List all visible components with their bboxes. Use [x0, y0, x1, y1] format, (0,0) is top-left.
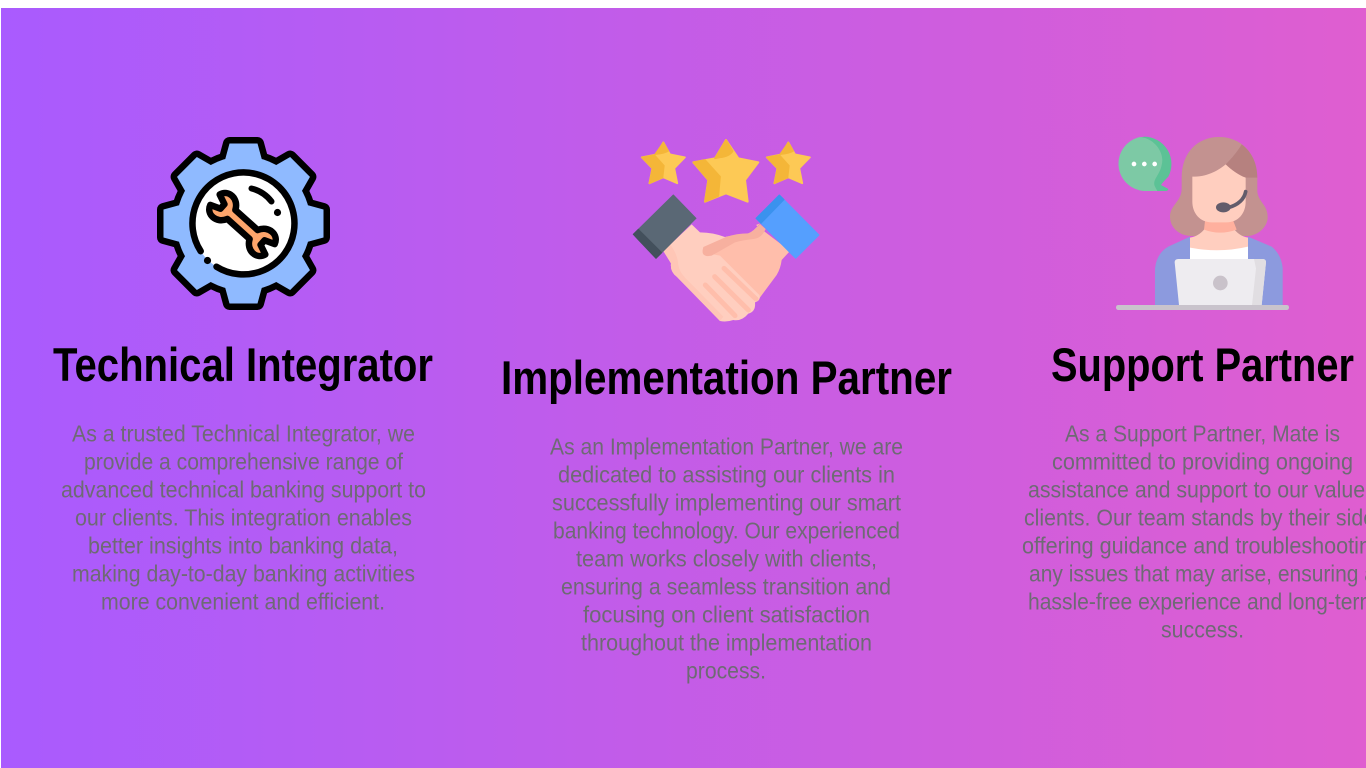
description: Support Partner	[1022, 420, 1366, 642]
description: Implementation Partner: team works closely with clients,	[576, 546, 877, 572]
description: Implementation Partner: As an Implementation Partner, we are	[550, 434, 903, 460]
description: Technical Integrator: better insights into banking data,	[88, 532, 398, 558]
description: Technical Integrator: making day-to-day banking activities	[72, 560, 415, 586]
icon: gear with wrench	[164, 144, 324, 304]
description: Implementation Partner	[550, 434, 903, 684]
description: Implementation Partner: banking technology. Our experienced	[553, 518, 900, 544]
description: Technical Integrator	[61, 420, 426, 614]
description: Implementation Partner: focusing on client satisfaction	[583, 602, 870, 628]
description: Support Partner: As a Support Partner, Mate is	[1065, 420, 1340, 446]
description: Implementation Partner: ensuring a seamless transition and	[561, 574, 891, 600]
description: Implementation Partner: successfully implementing our smart	[552, 490, 902, 516]
icon: support agent with headset and speech bubble	[1116, 137, 1289, 310]
description: Technical Integrator: advanced technical banking support to	[61, 476, 426, 502]
description: Implementation Partner: dedicated to assisting our clients in	[558, 462, 895, 488]
description: Implementation Partner: process.	[686, 658, 766, 684]
description: Support Partner: committed to providing ongoing	[1052, 448, 1353, 474]
panel: Technical Integrator	[53, 144, 433, 614]
description: Technical Integrator: our clients. This integration enables	[75, 504, 412, 530]
icon: handshake with three stars	[633, 140, 819, 321]
panel: Implementation Partner	[501, 140, 952, 683]
panel: Support Partner	[1022, 137, 1366, 642]
description: Technical Integrator: more convenient and efficient.	[101, 588, 385, 614]
heading: Technical Integrator: Technical Integrator	[53, 338, 433, 391]
description: Technical Integrator: provide a comprehensive range of	[84, 448, 404, 474]
description: Technical Integrator: As a trusted Technical Integrator, we	[72, 420, 415, 446]
heading: Implementation Partner: Implementation Partner	[501, 351, 952, 404]
description: Implementation Partner: throughout the implementation	[581, 630, 872, 656]
description: Support Partner: success.	[1161, 616, 1244, 642]
